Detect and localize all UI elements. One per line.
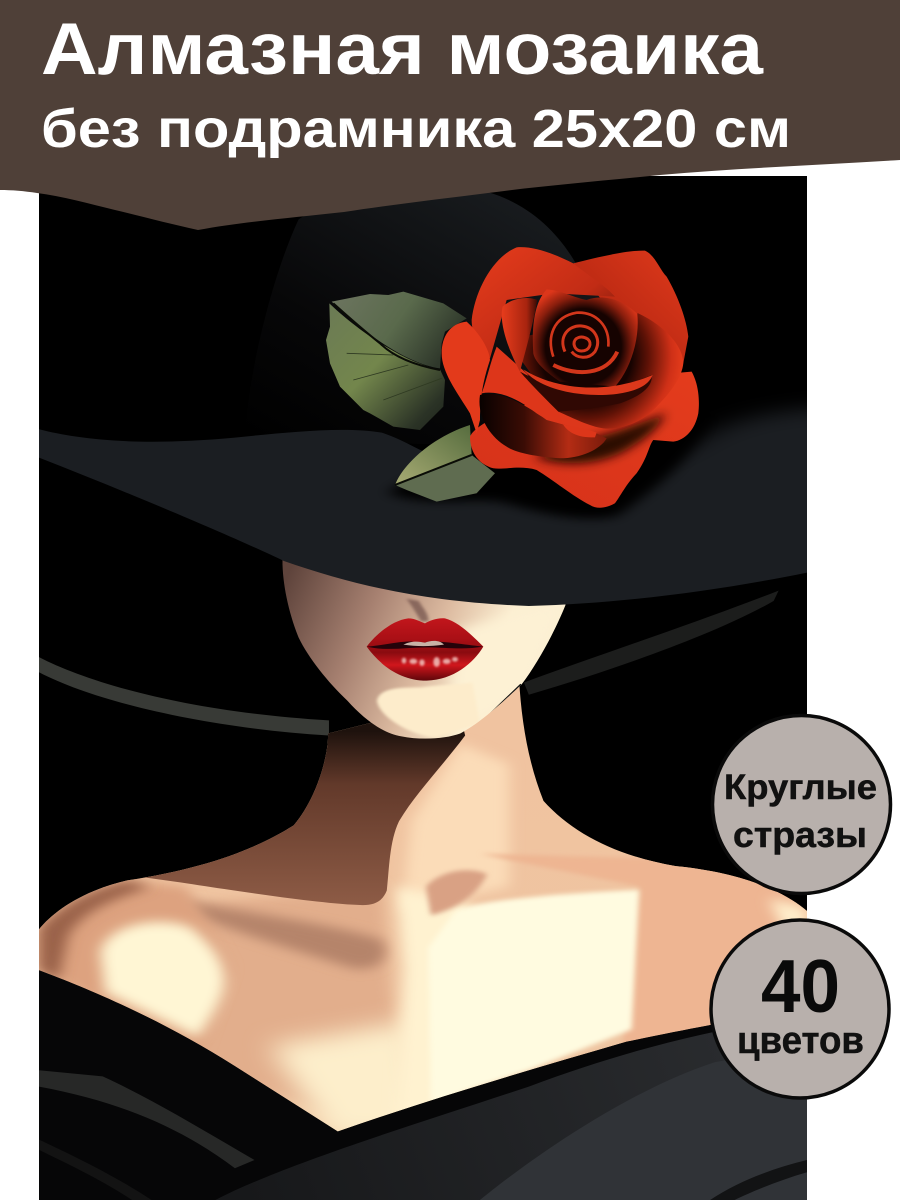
nose: [406, 599, 428, 621]
lower leaf: [395, 425, 495, 502]
hat: [39, 191, 842, 606]
right hat band: [524, 591, 779, 695]
inner left petal: [502, 298, 537, 372]
figure: hat bands, neck, shoulders, face, lips, dress: [39, 560, 807, 1200]
chin highlight: [377, 682, 480, 738]
mid chest tone: [40, 896, 395, 1119]
lips: [367, 618, 483, 681]
badge: round rhinestones: [712, 716, 890, 894]
bottom large petal: [470, 372, 699, 508]
badge: round rhinestones: Круглые: [724, 768, 877, 807]
front fold petal: [482, 347, 597, 437]
rose shadow: [388, 437, 697, 522]
left shoulder highlight: [40, 878, 207, 1042]
rose with leaves: [326, 247, 699, 508]
painting: woman in black hat with red rose: [39, 176, 842, 1200]
neck shadow: [122, 715, 465, 905]
neck light: [401, 744, 509, 911]
brim: [39, 402, 807, 606]
right lower petal: [507, 313, 683, 429]
right shoulder peach: [480, 854, 807, 1050]
badge: 40 colours: цветов: [737, 1020, 864, 1062]
chest highlight: [428, 890, 639, 1103]
spiral: [551, 313, 617, 372]
right brim fade: [681, 336, 807, 446]
subtitle: без подрамника 25х20 см: [41, 99, 791, 159]
left hat band: [39, 657, 329, 736]
rose cup: [479, 394, 607, 458]
header banner: [0, 0, 900, 230]
face: [274, 560, 578, 744]
front curled lip: [523, 369, 653, 395]
inner crown petal: [533, 289, 638, 387]
inner dark basin: [520, 372, 652, 412]
collarbone spot: [426, 870, 487, 915]
badge: 40 colours: [711, 920, 889, 1098]
badge: 40 colours: 40: [761, 944, 840, 1028]
left petal: [442, 322, 490, 433]
neck and shoulders: [39, 662, 807, 1152]
top left petal: [472, 247, 615, 358]
crown: [272, 193, 600, 414]
collarbone light band: [397, 887, 470, 1123]
rose petals: [442, 247, 699, 508]
badge: round rhinestones: стразы: [733, 814, 867, 855]
title: Алмазная мозаика: [41, 9, 765, 90]
back right petal: [573, 251, 688, 363]
dress: [39, 970, 807, 1200]
upper leaf: [326, 292, 467, 430]
